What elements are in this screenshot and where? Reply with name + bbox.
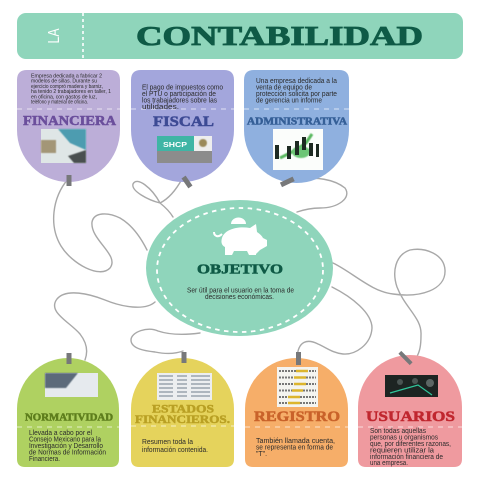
financiera description xyxy=(31,74,111,106)
registro description: "T". xyxy=(256,451,267,458)
normatividad heading: NORMATIVIDAD xyxy=(25,412,113,424)
normatividad description: Financiera. xyxy=(29,456,60,463)
normatividad description: de Normas de Información xyxy=(29,450,106,456)
panel: administrativa xyxy=(244,70,349,183)
usuarios description: personas u organismos xyxy=(370,434,438,442)
estados description: información contenida. xyxy=(142,447,208,454)
estados photo: spreadsheet xyxy=(157,373,212,400)
administrativa photo: team and growth chart xyxy=(273,129,323,170)
estados description xyxy=(142,439,208,454)
normatividad photo: calculator and chart xyxy=(45,373,98,397)
icon: piggy bank xyxy=(214,218,267,255)
objetivo description: decisiones económicas. xyxy=(205,294,274,301)
main title: CONTABILIDAD xyxy=(136,21,423,51)
panel: estados financieros xyxy=(131,358,234,467)
financiera description: modelos de sillas. Durante su xyxy=(31,79,97,85)
registro description: se representa en forma de xyxy=(256,444,333,452)
estados heading: FINANCIEROS. xyxy=(135,412,230,426)
panel: fiscal xyxy=(131,70,234,182)
fiscal description: el PTU o participación de xyxy=(142,91,216,98)
usuarios description: que, por diferentes razonas, xyxy=(370,441,451,448)
administrativa description: protección solicita por parte xyxy=(256,91,337,98)
administrativa description xyxy=(256,78,337,104)
registro description: También llamada cuenta, xyxy=(256,438,335,445)
panel: usuarios xyxy=(358,355,462,467)
central circle: objetivo xyxy=(146,200,333,336)
banner label: LA: LA xyxy=(46,28,63,44)
connecting strings xyxy=(54,178,445,360)
estados description: Resumen toda la xyxy=(142,439,193,446)
fiscal description xyxy=(142,84,223,111)
usuarios description: una empresa. xyxy=(370,460,408,467)
administrativa heading: ADMINISTRATIVA xyxy=(247,116,347,128)
objetivo heading: OBJETIVO xyxy=(197,262,283,278)
registro description xyxy=(256,438,335,458)
financiera description: Empresa dedicada a fabricar 2 xyxy=(31,74,102,80)
financiera description: en oficina, con gastos de luz, xyxy=(31,94,97,100)
normatividad description xyxy=(29,430,106,463)
fiscal description: El pago de impuestos como xyxy=(142,84,223,92)
panel: financiera xyxy=(17,70,120,182)
usuarios description: requieren utilizar la xyxy=(370,448,434,454)
usuarios description xyxy=(370,428,451,467)
objetivo description xyxy=(187,288,294,301)
panel: registro xyxy=(245,358,348,467)
objetivo description: Ser útil para el usuario en la toma de xyxy=(187,288,294,294)
financiera description: teléfono y material de oficina. xyxy=(31,100,88,106)
financiera heading: FINANCIERA xyxy=(23,114,117,129)
registro photo: ledger table xyxy=(277,367,318,407)
financiera description: ejercicio compró madera y barniz, xyxy=(31,84,103,90)
normatividad description: Consejo Mexicano para la xyxy=(29,436,101,444)
administrativa description: venta de equipo de xyxy=(256,84,312,92)
financiera photo: calculator xyxy=(41,129,86,163)
estados heading: ESTADOS xyxy=(152,402,214,416)
usuarios description: información financiera de xyxy=(370,454,443,461)
fiscal heading: FISCAL xyxy=(153,114,214,130)
usuarios description: Son todas aquellas xyxy=(370,428,426,435)
administrativa description: Una empresa dedicada a la xyxy=(256,78,337,85)
estados heading xyxy=(135,402,230,426)
usuarios heading: USUARIOS xyxy=(366,409,455,425)
fiscal description: los trabajadores sobre las xyxy=(142,98,217,104)
title banner xyxy=(17,13,463,59)
registro heading: REGISTRO xyxy=(254,409,340,425)
usuarios photo: network of people xyxy=(385,375,438,397)
panel: normatividad xyxy=(17,358,119,467)
financiera description: ha tenido 2 trabajadores en taller, 1 xyxy=(31,89,111,95)
normatividad description: Llevada a cabo por el xyxy=(29,430,92,437)
string clips xyxy=(66,175,413,365)
administrativa description: de gerencia un informe xyxy=(256,98,322,104)
normatividad description: Investigación y Desarrollo xyxy=(29,443,103,450)
fiscal logo: SHCP: SHCP xyxy=(163,142,187,149)
fiscal description: utilidades. xyxy=(142,104,179,111)
